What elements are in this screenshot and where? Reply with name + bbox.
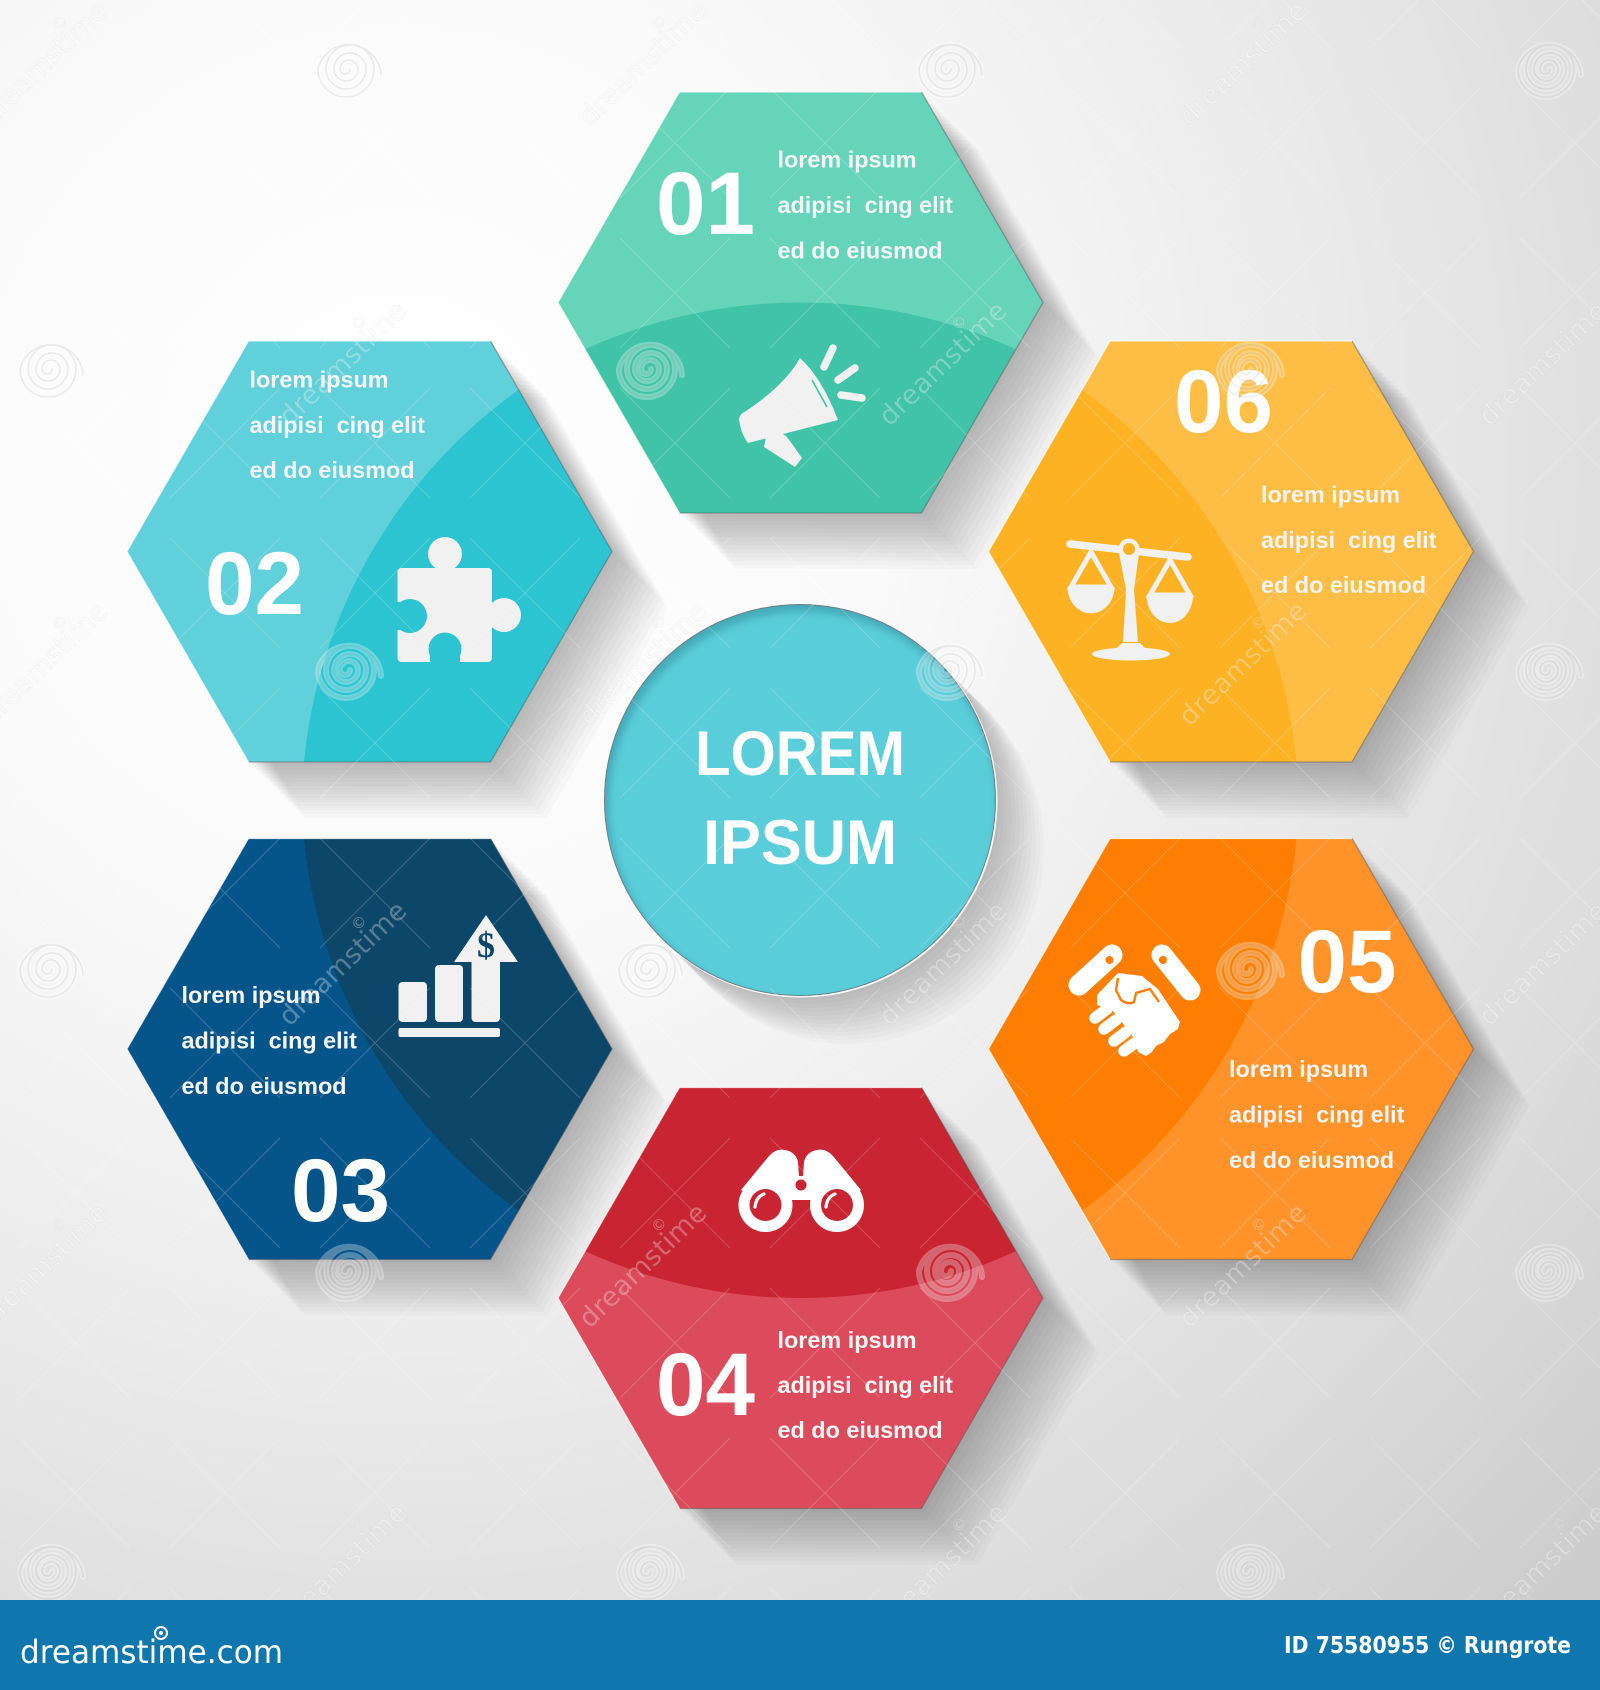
panel: hexagon 04 xyxy=(558,1087,1044,1510)
watermark overlay: dreamstime xyxy=(273,895,413,1032)
watermark overlay: © xyxy=(647,611,671,634)
text block 05: lorem ipsum xyxy=(1229,1056,1368,1082)
watermark overlay: © xyxy=(48,611,72,634)
icon: binoculars xyxy=(738,1150,864,1232)
footer logo: dreamstime.com xyxy=(20,1633,283,1671)
watermark overlay: © xyxy=(947,911,971,934)
icon: megaphone xyxy=(739,348,862,467)
panel: hexagon 02 xyxy=(127,340,613,763)
number 05: 05 xyxy=(1298,911,1396,1011)
centre heading: LOREM xyxy=(695,719,905,789)
watermark overlay: dreamstime xyxy=(873,895,1013,1032)
text block 04: ed do eiusmod xyxy=(778,1417,943,1443)
long shadows xyxy=(131,96,1530,1564)
watermark overlay: © xyxy=(947,311,971,334)
text block 04: adipisi cing elit xyxy=(778,1372,953,1398)
icon: growth chart with dollar arrow: $ xyxy=(477,925,495,965)
text block 06: ed do eiusmod xyxy=(1261,572,1426,598)
number 03: 03 xyxy=(291,1140,390,1240)
watermark overlay: © xyxy=(1547,1513,1571,1536)
watermark overlay: dreamstime xyxy=(273,1497,413,1634)
text block 03: ed do eiusmod xyxy=(182,1073,347,1099)
text block 01: adipisi cing elit xyxy=(778,192,953,218)
watermark overlay: © xyxy=(347,311,371,334)
text block 02 xyxy=(250,366,425,483)
watermark overlay: © xyxy=(947,1513,971,1536)
panel: hexagon 05 xyxy=(988,838,1474,1260)
text block 01: lorem ipsum xyxy=(778,146,917,172)
text block 06: lorem ipsum xyxy=(1261,482,1400,508)
icon: growth chart with dollar arrow xyxy=(398,915,518,1037)
watermark overlay: © xyxy=(1247,1213,1271,1236)
text block 02: ed do eiusmod xyxy=(250,457,415,483)
text block 06 xyxy=(1261,482,1437,598)
watermark overlay: © xyxy=(347,1513,371,1536)
number 02: 02 xyxy=(205,533,304,633)
watermark overlay: © xyxy=(1247,11,1271,34)
text block 04 xyxy=(778,1327,953,1443)
text block 05: adipisi cing elit xyxy=(1229,1102,1405,1128)
text block 05: ed do eiusmod xyxy=(1229,1147,1394,1173)
panel: centre circle xyxy=(604,604,998,1000)
watermark overlay: © xyxy=(347,911,371,934)
watermark overlay: © xyxy=(647,1213,671,1236)
number 06: 06 xyxy=(1174,351,1273,451)
panel: hexagon 01 xyxy=(558,92,1044,514)
watermark overlay: dreamstime xyxy=(273,295,413,432)
text block 01: ed do eiusmod xyxy=(778,238,943,264)
panel: hexagon 03 xyxy=(127,838,613,1260)
watermark overlay: dreamstime xyxy=(873,1497,1013,1634)
watermark overlay: dreamstime xyxy=(873,295,1013,432)
icon: handshake xyxy=(1079,955,1190,1056)
text block 02: lorem ipsum xyxy=(250,366,389,392)
watermark overlay: dreamstime xyxy=(573,1197,713,1334)
watermark overlay: © xyxy=(1547,311,1571,334)
text block 02: adipisi cing elit xyxy=(250,412,425,438)
footer credit: ID 75580955 © Rungrote xyxy=(1284,1633,1571,1659)
centre heading: IPSUM xyxy=(703,808,897,878)
watermark overlay: © xyxy=(647,11,671,34)
text block 05 xyxy=(1229,1056,1405,1173)
panel: hexagon 06 xyxy=(988,340,1474,763)
text block 06: adipisi cing elit xyxy=(1261,527,1437,553)
watermark overlay: © xyxy=(1247,611,1271,634)
number 01: 01 xyxy=(656,153,755,253)
watermark overlay: © xyxy=(48,1213,72,1236)
text block 04: lorem ipsum xyxy=(778,1327,917,1353)
watermark overlay: © xyxy=(1547,911,1571,934)
watermark overlay: © xyxy=(48,11,72,34)
text block 03: lorem ipsum xyxy=(182,982,321,1008)
watermark overlay: dreamstime xyxy=(1173,1197,1313,1334)
icon: balance scales xyxy=(1068,538,1193,660)
text block 03: adipisi cing elit xyxy=(182,1028,357,1054)
watermark overlay: dreamstime xyxy=(573,595,713,732)
watermark overlay: dreamstime xyxy=(1173,595,1313,732)
icon: puzzle piece xyxy=(393,537,521,666)
number 04: 04 xyxy=(656,1334,755,1434)
text block 03 xyxy=(182,982,357,1099)
centre heading xyxy=(695,719,905,878)
text block 01 xyxy=(778,146,953,264)
footer bar xyxy=(0,1600,1600,1690)
